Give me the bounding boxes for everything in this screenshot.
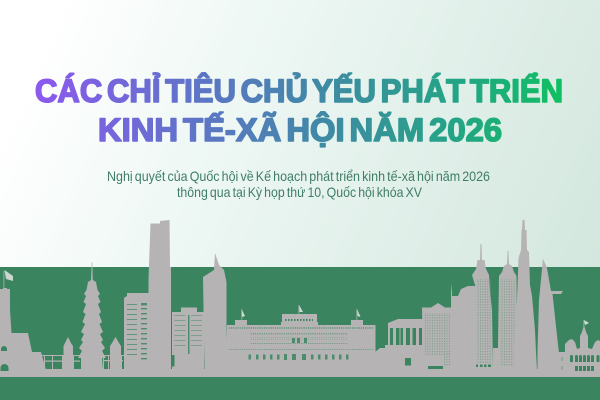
subtitle: thông qua tại Kỳ họp thứ 10, Quốc hội khóa XV xyxy=(177,184,423,200)
title xyxy=(35,73,563,148)
small tower left xyxy=(64,337,73,370)
sail-shaped tower with helipad xyxy=(538,258,563,370)
title: CÁC CHỈ TIÊU CHỦ YẾU PHÁT TRIỂN xyxy=(35,73,563,109)
mid office block xyxy=(171,308,204,370)
tower with spire xyxy=(472,244,493,370)
colonial city hall xyxy=(559,320,600,371)
subtitle xyxy=(107,168,490,200)
palace building xyxy=(227,305,376,370)
skyline base strip xyxy=(0,369,600,377)
twin tower with spire xyxy=(498,251,517,370)
memorial with columns xyxy=(375,319,428,370)
pagoda xyxy=(78,262,106,370)
tallest left tower xyxy=(148,220,171,370)
narrow fill right of tower xyxy=(493,348,498,370)
title: KINH TẾ-XÃ HỘI NĂM 2026 xyxy=(98,112,502,148)
office building with stripes xyxy=(124,293,149,370)
subtitle: Nghị quyết của Quốc hội về Kế hoạch phát triển kinh tế-xã hội năm 2026 xyxy=(107,168,490,184)
landmark tower xyxy=(514,220,537,370)
landmark: left clock tower building xyxy=(0,270,46,371)
low fence between buildings xyxy=(41,355,124,369)
green ground band xyxy=(0,267,600,400)
city skyline xyxy=(0,220,600,377)
small tower right xyxy=(110,337,121,370)
hotel with grid windows xyxy=(422,303,451,370)
stepped building xyxy=(451,283,477,370)
pointed curved tower xyxy=(203,253,228,370)
